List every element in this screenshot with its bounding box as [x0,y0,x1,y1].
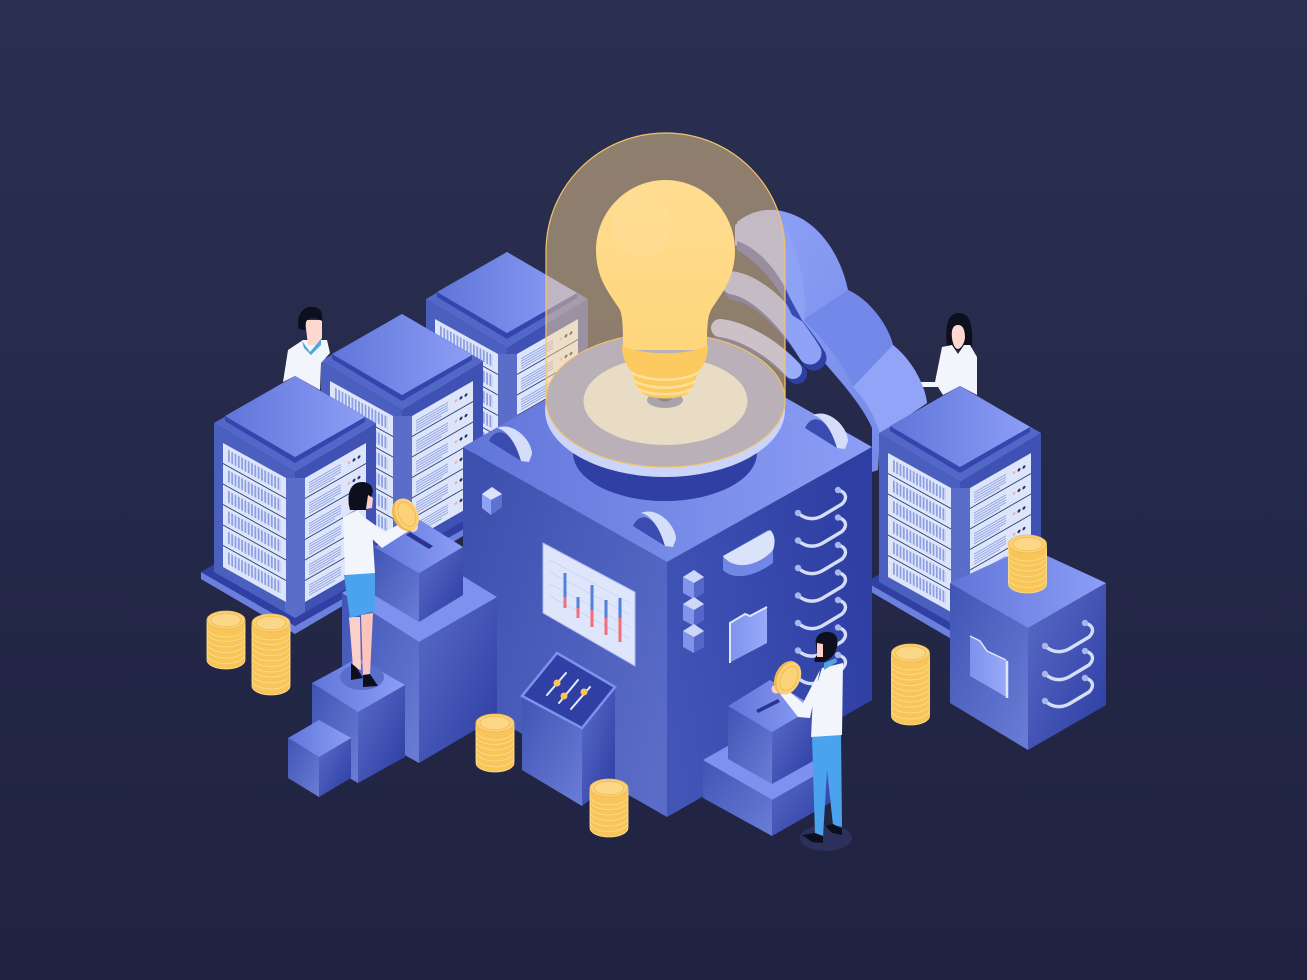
left pedestal [342,520,497,763]
coin [769,657,806,699]
glowing inner disc [584,357,748,445]
coin box [374,520,463,622]
main machine cube [463,330,872,817]
drawer handles [1042,620,1092,707]
person: woman inserting coin [343,482,424,687]
dark ring under glass dome [573,405,757,501]
cloud connector arch [720,210,927,472]
icon: folder on right face [729,607,767,663]
drawer handles on right face [795,487,845,684]
wifi style fingers [720,283,814,374]
coin stack on box [1008,535,1046,593]
stacked buttons [683,570,704,653]
step box [312,658,405,783]
icon: folder [970,636,1008,698]
small block on left face [482,487,502,515]
coin stack 5 [892,644,930,725]
plate under dome [545,343,785,477]
half drum on right face [723,530,775,576]
coin stack 2 [252,614,290,695]
coin stack 4 [590,779,628,837]
right pedestal [703,680,830,836]
sliders [547,673,590,709]
half disc vents [489,414,848,547]
server rack: back [413,252,602,510]
coin box [728,680,815,784]
server rack: right [866,386,1055,644]
coin [387,494,424,535]
server rack: middle [308,314,497,572]
control kiosk [522,653,615,806]
light bulb [596,180,735,408]
coin stack 3 [476,714,514,772]
server rack: front left [201,376,390,634]
dome base disc [546,333,785,467]
person: man inserting coin [769,632,852,851]
small cube [288,720,351,797]
glass dome [546,133,785,467]
storage box with folder and handles [950,547,1106,750]
coin stack 1 [207,611,245,669]
person: man behind servers [283,307,330,390]
chart panel [543,543,635,666]
person: woman behind right server [920,313,977,395]
